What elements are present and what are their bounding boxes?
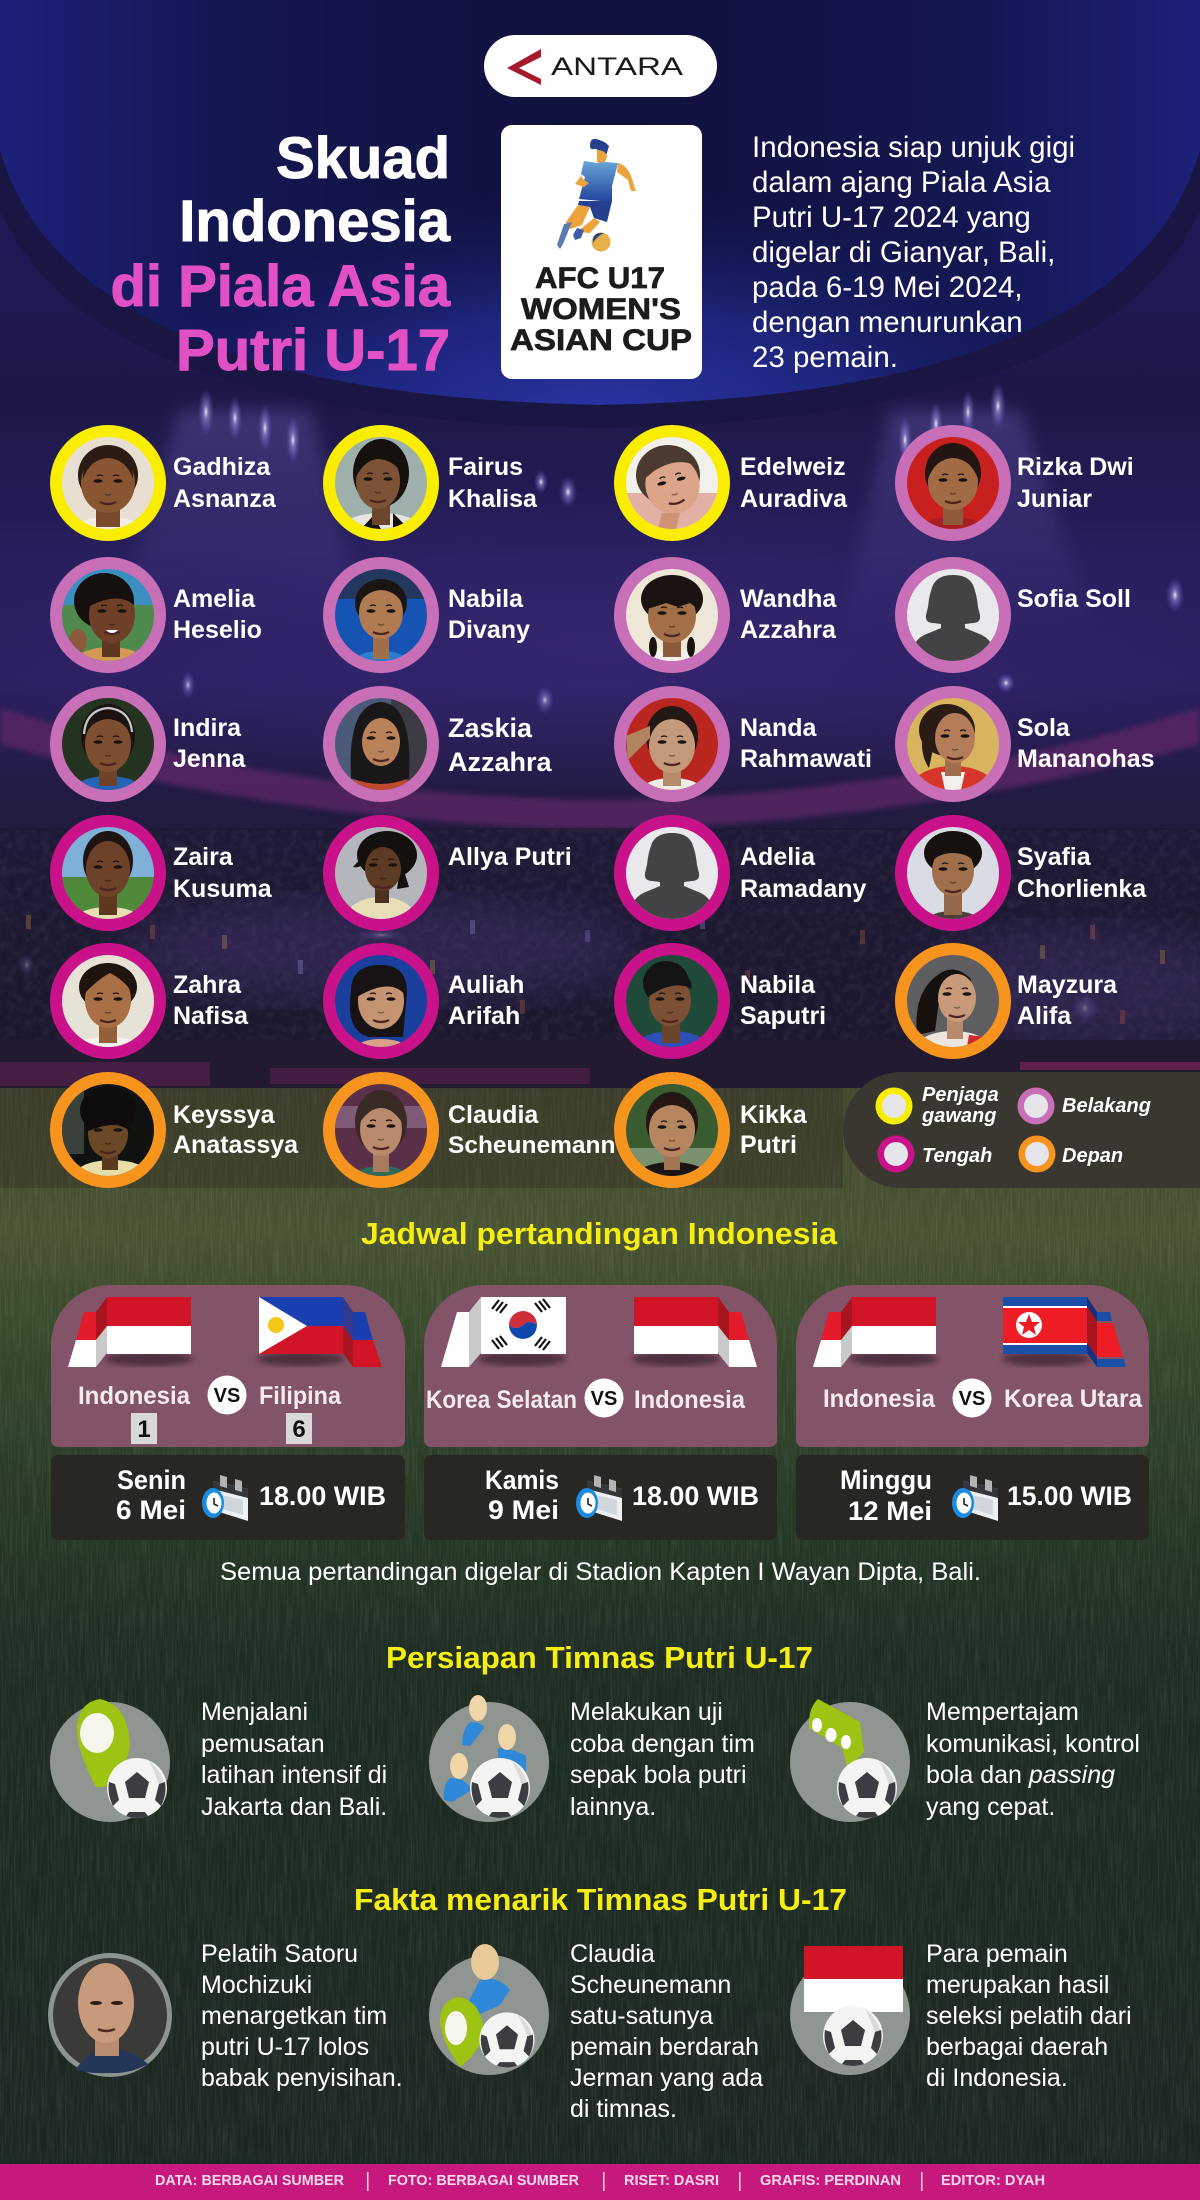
title: Putri U-17 bbox=[176, 318, 450, 383]
player: Gadhiza Asnanza: Gadhiza bbox=[173, 453, 271, 481]
fact 3 bbox=[790, 1940, 1132, 2092]
player: Sola Mananohas: Mananohas bbox=[1017, 745, 1155, 773]
photo: coach Satoru Mochizuki bbox=[48, 1953, 172, 2077]
player: Fairus Khalisa bbox=[323, 425, 538, 545]
player: Mayzura Alifa bbox=[895, 943, 1118, 1059]
schedule bar: Kamis 9 Mei bbox=[424, 1455, 777, 1540]
icon: calendar clock bbox=[952, 1475, 998, 1521]
intro text: dalam ajang Piala Asia bbox=[752, 166, 1051, 199]
flag: North Korea bbox=[1003, 1297, 1126, 1367]
player: Adelia Ramadany bbox=[614, 815, 867, 931]
schedule bar: Minggu 12 Mei: 15.00 WIB bbox=[1007, 1481, 1132, 1511]
player: Sola Mananohas bbox=[895, 686, 1155, 810]
player: Gadhiza Asnanza bbox=[50, 425, 277, 545]
text: pemain berdarah bbox=[570, 2033, 759, 2061]
legend item: Depan: Depan bbox=[1062, 1145, 1123, 1167]
text: yang cepat. bbox=[926, 1793, 1055, 1821]
legend item: Tengah bbox=[878, 1136, 992, 1172]
heading: Persiapan Timnas Putri U-17: Persiapan Timnas Putri U-17 bbox=[386, 1640, 813, 1675]
match card: Indonesia vs Korea Utara: Korea Utara bbox=[1004, 1385, 1143, 1413]
text: merupakan hasil bbox=[926, 1971, 1109, 1999]
player: Fairus Khalisa: Fairus bbox=[448, 453, 523, 481]
text: Menjalani bbox=[201, 1698, 308, 1726]
player: Syafia Chorlienka: Syafia bbox=[1017, 843, 1092, 871]
legend item: Depan bbox=[1018, 1136, 1123, 1172]
text: babak penyisihan. bbox=[201, 2064, 403, 2092]
text: Jakarta dan Bali. bbox=[201, 1793, 387, 1821]
player: Rizka Dwi Juniar: Juniar bbox=[1017, 485, 1092, 513]
player: Nabila Saputri: Nabila bbox=[740, 971, 816, 999]
legend: positions bbox=[843, 1072, 1200, 1188]
match card: Indonesia vs Korea Utara: Indonesia bbox=[823, 1385, 936, 1413]
icon: flag and ball bbox=[790, 1946, 910, 2075]
player: Adelia Ramadany: Ramadany bbox=[740, 875, 867, 903]
match card: Indonesia vs Korea Utara bbox=[796, 1285, 1149, 1447]
match card: Korea Selatan vs Indonesia: VS bbox=[591, 1388, 617, 1410]
player: Amelia Heselio: Heselio bbox=[173, 616, 262, 644]
player: Zahra Nafisa: Zahra bbox=[173, 971, 242, 999]
player: Indira Jenna: Jenna bbox=[173, 745, 246, 773]
text: Mochizuki bbox=[201, 1971, 312, 1999]
text bbox=[201, 1698, 387, 1821]
schedule bar: Kamis 9 Mei: 9 Mei bbox=[488, 1495, 559, 1525]
schedule bar: Senin 6 Mei: 6 Mei bbox=[116, 1495, 186, 1525]
text: Para pemain bbox=[926, 1940, 1068, 1968]
icon: map pin and ball bbox=[50, 1699, 170, 1822]
intro text: dengan menurunkan bbox=[752, 306, 1023, 339]
schedule bar: Minggu 12 Mei: Minggu bbox=[840, 1465, 932, 1495]
schedule bar: Minggu 12 Mei bbox=[796, 1455, 1149, 1540]
player: Keyssya Anatassya bbox=[50, 1072, 299, 1188]
text bbox=[570, 1940, 763, 2123]
player: Amelia Heselio bbox=[50, 557, 262, 675]
logo wordmark bbox=[510, 262, 692, 357]
title: Indonesia bbox=[179, 189, 451, 254]
logo: ANTARA pill bbox=[484, 35, 717, 97]
logo wordmark: WOMEN'S bbox=[521, 293, 681, 326]
player: Claudia Scheunemann: Claudia bbox=[448, 1101, 539, 1129]
score: Indonesia 1 bbox=[131, 1413, 157, 1444]
footer credits: GRAFIS: PERDINAN bbox=[760, 2172, 901, 2189]
player: Mayzura Alifa: Alifa bbox=[1017, 1002, 1072, 1030]
player: Kikka Putri: Putri bbox=[740, 1131, 797, 1159]
player: Kikka Putri bbox=[614, 1072, 808, 1190]
player: Kikka Putri: Kikka bbox=[740, 1101, 808, 1129]
text bbox=[570, 1698, 755, 1821]
player: Auliah Arifah: Auliah bbox=[448, 971, 524, 999]
icon: calendar clock bbox=[202, 1475, 248, 1521]
logo card: AFC U17 Women's Asian Cup bbox=[501, 125, 702, 379]
player: Auliah Arifah: Arifah bbox=[448, 1002, 520, 1030]
footer credits: FOTO: BERBAGAI SUMBER bbox=[388, 2172, 579, 2189]
match card: Indonesia vs Filipina: VS bbox=[214, 1385, 240, 1407]
legend item: Penjaga gawang: Penjaga bbox=[922, 1084, 999, 1106]
player: Zahra Nafisa bbox=[50, 943, 249, 1059]
player: Claudia Scheunemann bbox=[323, 1072, 615, 1188]
logo: ANTARA pill: ANTARA bbox=[551, 53, 683, 81]
match card: Korea Selatan vs Indonesia bbox=[424, 1285, 777, 1447]
footer credits: RISET: DASRI bbox=[624, 2172, 719, 2189]
player: Edelweiz Auradiva bbox=[614, 425, 848, 541]
player: Nanda Rahmawati: Rahmawati bbox=[740, 745, 872, 773]
player: Allya Putri: Allya Putri bbox=[448, 843, 572, 871]
player: Adelia Ramadany: Adelia bbox=[740, 843, 816, 871]
player: Rizka Dwi Juniar bbox=[895, 425, 1134, 541]
venue note: Semua pertandingan digelar di Stadion Kapten I Wayan Dipta, Bali. bbox=[220, 1558, 981, 1586]
flag: Indonesia bbox=[813, 1297, 936, 1367]
text: sepak bola putri bbox=[570, 1761, 747, 1789]
intro text: 23 pemain. bbox=[752, 341, 898, 374]
player: Wandha Azzahra: Azzahra bbox=[740, 616, 837, 644]
player: Edelweiz Auradiva: Edelweiz bbox=[740, 453, 846, 481]
preparation 1 bbox=[50, 1698, 387, 1822]
player: Allya Putri bbox=[323, 815, 572, 937]
score: Indonesia 1: 1 bbox=[137, 1416, 151, 1443]
legend item: Belakang: Belakang bbox=[1062, 1095, 1151, 1117]
fact 1 bbox=[48, 1940, 403, 2092]
player: Fairus Khalisa: Khalisa bbox=[448, 485, 538, 513]
heading: Jadwal pertandingan Indonesia: Jadwal pertandingan Indonesia bbox=[361, 1216, 838, 1251]
schedule bar: Senin 6 Mei: Senin bbox=[117, 1465, 186, 1495]
text: bola dan passing bbox=[926, 1761, 1115, 1789]
player: Sola Mananohas: Sola bbox=[1017, 714, 1071, 742]
text bbox=[201, 1940, 403, 2092]
flag: Indonesia bbox=[68, 1297, 191, 1367]
legend item: Belakang bbox=[1018, 1088, 1151, 1124]
player: Nabila Saputri bbox=[614, 943, 826, 1059]
schedule bar: Senin 6 Mei: 18.00 WIB bbox=[259, 1481, 386, 1511]
intro text: digelar di Gianyar, Bali, bbox=[752, 236, 1055, 269]
match card: Indonesia vs Filipina: Indonesia bbox=[78, 1382, 191, 1410]
player: Claudia Scheunemann: Scheunemann bbox=[448, 1132, 615, 1159]
legend item: Tengah: Tengah bbox=[922, 1145, 992, 1167]
preparation 2 bbox=[429, 1695, 755, 1822]
player: Keyssya Anatassya: Keyssya bbox=[173, 1101, 276, 1129]
match card: Indonesia vs Filipina bbox=[51, 1285, 405, 1447]
text: latihan intensif di bbox=[201, 1761, 387, 1789]
player: Amelia Heselio: Amelia bbox=[173, 585, 256, 613]
player: Mayzura Alifa: Mayzura bbox=[1017, 971, 1118, 999]
flag: Philippines bbox=[259, 1297, 382, 1367]
text: lainnya. bbox=[570, 1793, 656, 1821]
preparation 3 bbox=[790, 1698, 1140, 1822]
icon: player, pin and ball bbox=[429, 1944, 549, 2075]
flag: Indonesia bbox=[634, 1297, 757, 1367]
score: Filipina 6: 6 bbox=[292, 1416, 306, 1443]
intro text: Indonesia siap unjuk gigi bbox=[752, 131, 1075, 164]
text: berbagai daerah bbox=[926, 2033, 1108, 2061]
schedule bar: Kamis 9 Mei: 18.00 WIB bbox=[632, 1481, 759, 1511]
match card: Indonesia vs Korea Utara: VS bbox=[959, 1388, 985, 1410]
fact 2 bbox=[429, 1940, 763, 2123]
text: Mempertajam bbox=[926, 1698, 1079, 1726]
text bbox=[926, 1698, 1140, 1821]
player: Syafia Chorlienka: Chorlienka bbox=[1017, 875, 1147, 903]
icon: team and ball bbox=[429, 1695, 549, 1822]
intro text bbox=[752, 131, 1075, 374]
score: Filipina 6 bbox=[286, 1413, 312, 1444]
player: Zaira Kusuma bbox=[50, 815, 273, 931]
player: Nabila Saputri: Saputri bbox=[740, 1002, 826, 1030]
player: Indira Jenna: Indira bbox=[173, 714, 242, 742]
heading: Fakta menarik Timnas Putri U-17: Fakta menarik Timnas Putri U-17 bbox=[354, 1882, 847, 1917]
player: Auliah Arifah bbox=[323, 943, 524, 1059]
schedule bar: Senin 6 Mei bbox=[51, 1455, 405, 1540]
player: Zaskia Azzahra bbox=[323, 686, 553, 802]
schedule bar: Kamis 9 Mei: Kamis bbox=[485, 1465, 559, 1495]
player: Zaskia Azzahra: Zaskia bbox=[448, 713, 533, 743]
title bbox=[110, 126, 451, 383]
text: seleksi pelatih dari bbox=[926, 2002, 1132, 2030]
player: Zaira Kusuma: Kusuma bbox=[173, 875, 273, 903]
text: di timnas. bbox=[570, 2095, 677, 2123]
schedule bar: Minggu 12 Mei: 12 Mei bbox=[848, 1496, 932, 1526]
icon: footballer bbox=[557, 139, 636, 252]
text bbox=[926, 1940, 1132, 2092]
legend item: Penjaga gawang: gawang bbox=[921, 1105, 996, 1127]
player: Zaskia Azzahra: Azzahra bbox=[448, 747, 553, 777]
footer credits: DATA: BERBAGAI SUMBER bbox=[155, 2172, 344, 2189]
player: Gadhiza Asnanza: Asnanza bbox=[173, 485, 277, 513]
player: Wandha Azzahra bbox=[614, 557, 837, 673]
player: Zahra Nafisa: Nafisa bbox=[173, 1002, 249, 1030]
player: Nabila Divany: Divany bbox=[448, 616, 530, 644]
logo wordmark: AFC U17 bbox=[535, 262, 665, 295]
text: Scheunemann bbox=[570, 1971, 731, 1999]
player: Nanda Rahmawati: Nanda bbox=[740, 714, 818, 742]
text: satu-satunya bbox=[570, 2002, 713, 2030]
player: Rizka Dwi Juniar: Rizka Dwi bbox=[1017, 453, 1134, 481]
flag: South Korea bbox=[441, 1297, 566, 1367]
player: Edelweiz Auradiva: Auradiva bbox=[740, 485, 848, 513]
logo wordmark: ASIAN CUP bbox=[510, 324, 692, 357]
match card: Korea Selatan vs Indonesia: Indonesia bbox=[634, 1386, 746, 1414]
text: Claudia bbox=[570, 1940, 655, 1968]
player: Indira Jenna bbox=[50, 686, 246, 804]
match card: Korea Selatan vs Indonesia: Korea Selatan bbox=[426, 1386, 577, 1414]
text: komunikasi, kontrol bbox=[926, 1730, 1140, 1758]
text: menargetkan tim bbox=[201, 2002, 387, 2030]
text: Melakukan uji bbox=[570, 1698, 723, 1726]
text: Jerman yang ada bbox=[570, 2064, 763, 2092]
footer credits: EDITOR: DYAH bbox=[941, 2172, 1045, 2189]
player: Wandha Azzahra: Wandha bbox=[740, 585, 837, 613]
player: Keyssya Anatassya: Anatassya bbox=[173, 1131, 299, 1159]
text: Pelatih Satoru bbox=[201, 1940, 358, 1968]
intro text: Putri U-17 2024 yang bbox=[752, 201, 1031, 234]
player: Syafia Chorlienka bbox=[895, 815, 1147, 931]
icon: calendar clock bbox=[576, 1475, 622, 1521]
player: Nabila Divany: Nabila bbox=[448, 585, 524, 613]
grass band behind last row bbox=[0, 1088, 843, 1188]
player: Sofia Soll: Sofia Soll bbox=[1017, 585, 1131, 613]
text: pemusatan bbox=[201, 1730, 325, 1758]
text: putri U-17 lolos bbox=[201, 2033, 369, 2061]
icon: chat bubble and ball bbox=[790, 1699, 910, 1822]
title: Skuad bbox=[276, 126, 450, 191]
text: di Indonesia. bbox=[926, 2064, 1068, 2092]
player: Nanda Rahmawati bbox=[614, 686, 872, 802]
player: Nabila Divany bbox=[323, 557, 530, 673]
title: di Piala Asia bbox=[110, 254, 451, 319]
text: coba dengan tim bbox=[570, 1730, 755, 1758]
match card: Indonesia vs Filipina: Filipina bbox=[259, 1382, 342, 1410]
intro text: pada 6-19 Mei 2024, bbox=[752, 271, 1023, 304]
legend item: Penjaga gawang bbox=[876, 1084, 999, 1127]
player: Sofia Soll bbox=[895, 557, 1131, 673]
footer credits bbox=[0, 2164, 1200, 2200]
player: Zaira Kusuma: Zaira bbox=[173, 843, 234, 871]
